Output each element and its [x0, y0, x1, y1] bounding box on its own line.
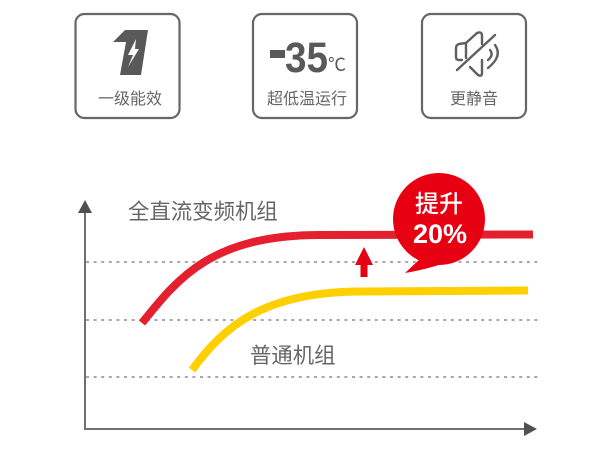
- red curve: full DC inverter unit: [142, 234, 533, 323]
- icon: minus 35 degrees: 35: [285, 34, 328, 82]
- label: quieter: 更静音: [450, 90, 498, 108]
- series label: full DC inverter unit: 全直流变频机组: [128, 200, 278, 224]
- series label: standard unit: 普通机组: [250, 344, 336, 368]
- chart gridlines: [86, 262, 538, 377]
- feature card: quieter: [422, 14, 526, 118]
- y axis arrow: [78, 200, 92, 430]
- feature card: first-class energy efficiency: [76, 14, 180, 118]
- feature card: low temperature operation: [253, 14, 357, 118]
- yellow curve: standard unit: [192, 290, 528, 370]
- icon: minus 35 degrees: ℃: [328, 55, 346, 75]
- icon: muted speaker: [456, 32, 498, 76]
- x axis arrow: [84, 422, 537, 436]
- callout: 20% improvement: 20%: [413, 219, 467, 249]
- line chart: [78, 173, 538, 436]
- icon: number one with lightning bolt: [113, 30, 148, 75]
- icon: minus 35 degrees: [270, 34, 346, 82]
- callout: 20% improvement: 提升: [415, 191, 463, 218]
- callout: 20% improvement: [393, 173, 485, 273]
- arrow: upward improvement: [355, 247, 373, 277]
- label: energy efficiency: 一级能效: [98, 90, 162, 108]
- label: low temperature operation: 超低温运行: [267, 90, 347, 108]
